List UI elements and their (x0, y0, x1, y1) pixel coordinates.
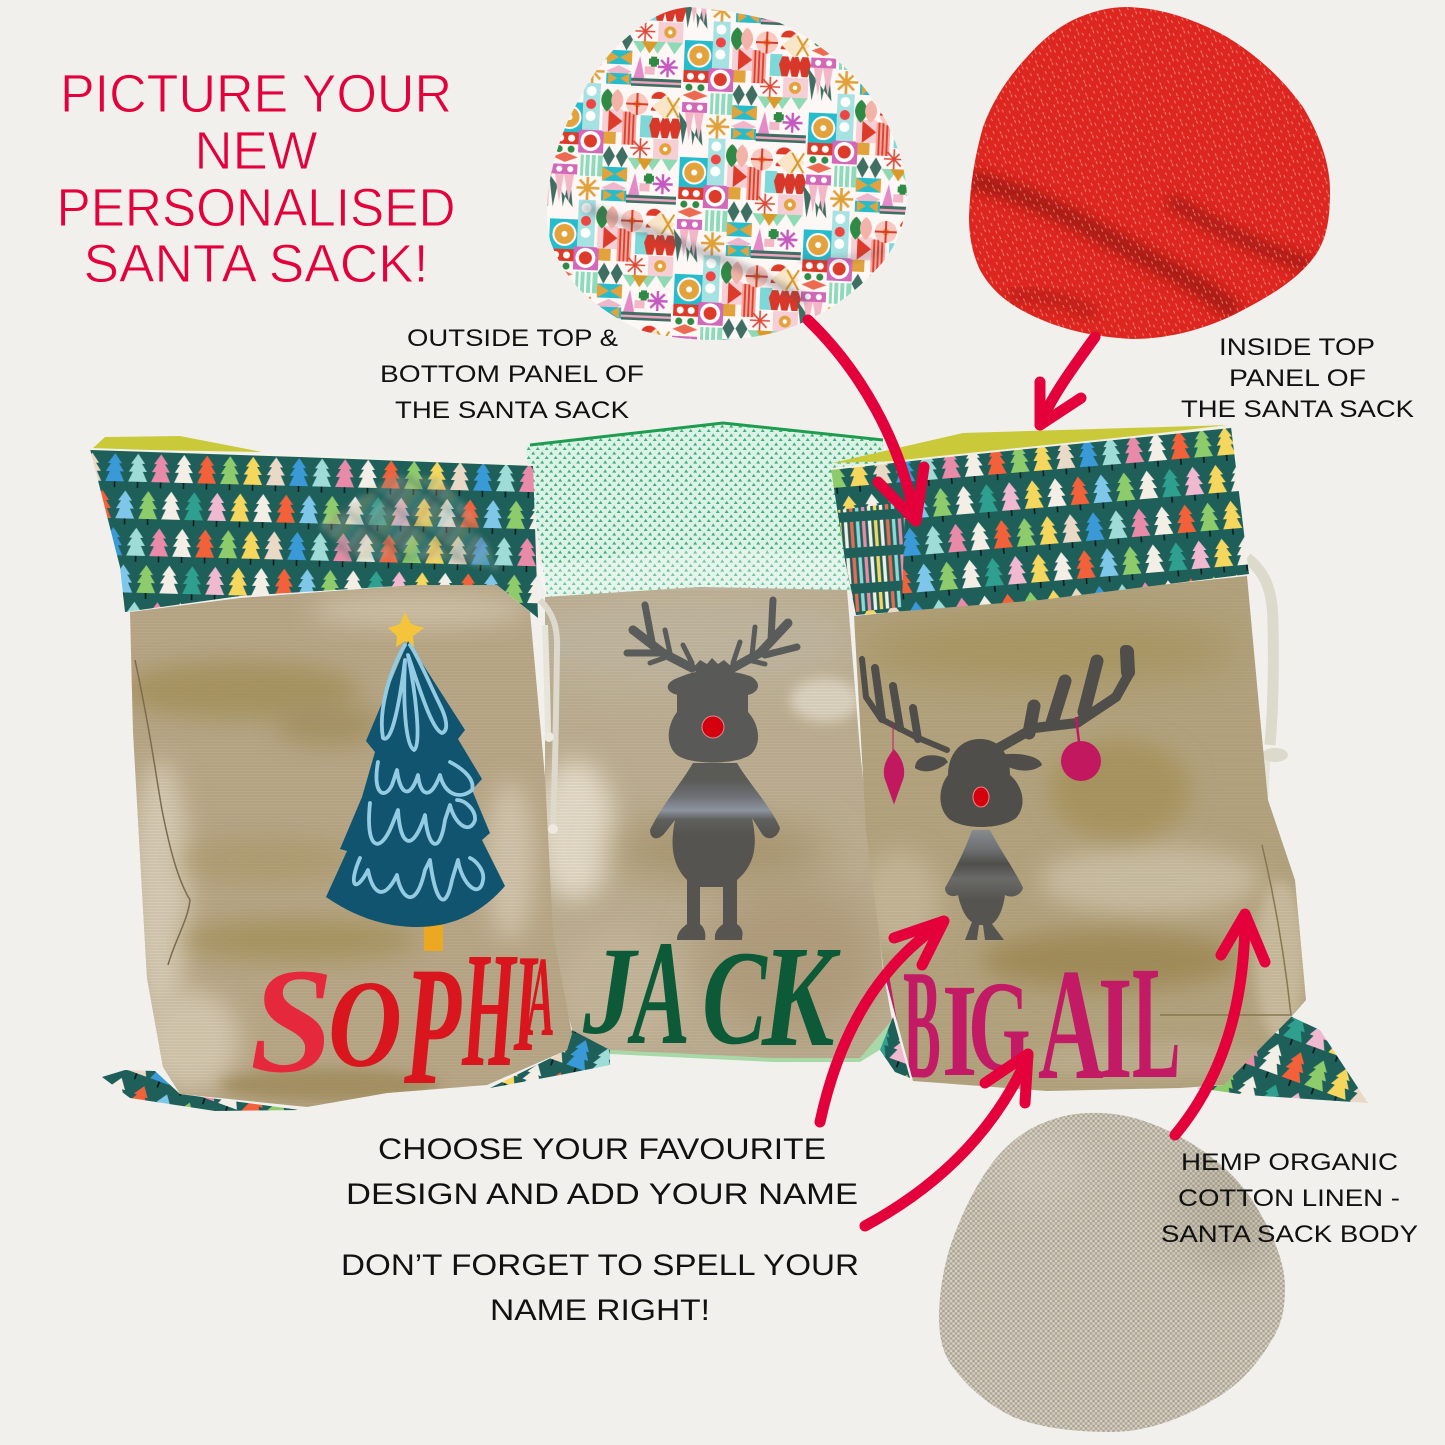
green fabric base (610, 1012, 896, 1062)
name: SOPHIA: A (525, 933, 555, 1060)
name: ABIGAIL: B (903, 937, 941, 1112)
linen body (130, 585, 572, 1107)
bauble left (884, 724, 904, 803)
arrow: red swatch to lining (1040, 337, 1095, 425)
trunk (424, 925, 443, 951)
name: JACK: C (702, 924, 768, 1073)
name: SOPHIA: P (403, 932, 462, 1120)
title (56, 64, 456, 294)
arrow: choose your design to reindeer (820, 921, 944, 1122)
band fabric (831, 427, 1249, 615)
panel: Jack sack, green top and reindeer (520, 423, 900, 1077)
name: ABIGAIL (886, 970, 1178, 1078)
linen body (854, 576, 1306, 1091)
arrow: geometric swatch to band (808, 320, 924, 521)
squiggle decorations (354, 645, 483, 900)
star (388, 612, 424, 647)
band gathered strips (838, 502, 905, 612)
name: SOPHIA (250, 919, 555, 1120)
label: outside panel: THE SANTA SACK (395, 397, 629, 424)
name: ABIGAIL: I (1098, 947, 1132, 1110)
bottom fold fabric (102, 1030, 610, 1111)
band fold highlight (318, 475, 500, 570)
name: JACK: J (582, 923, 640, 1061)
name: ABIGAIL: A (1038, 937, 1104, 1114)
label: inside panel: PANEL OF (1229, 365, 1366, 392)
bottom fold fabric (880, 1016, 1368, 1103)
name: SOPHIA: H (461, 919, 518, 1102)
callout: choose your design: DESIGN AND ADD YOUR NAME (346, 1178, 858, 1211)
tree (326, 612, 505, 951)
reindeer (862, 650, 1130, 940)
label: hemp body (1161, 1149, 1418, 1248)
label: inside panel (1181, 334, 1414, 423)
name: JACK (582, 910, 841, 1077)
name: ABIGAIL: A (860, 942, 909, 1109)
name: ABIGAIL: G (968, 956, 1031, 1099)
title: PERSONALISED (56, 178, 456, 238)
drawstring rope (540, 600, 558, 834)
label: hemp body: COTTON LINEN - (1178, 1185, 1400, 1212)
label: inside panel: THE SANTA SACK (1181, 396, 1414, 423)
callout: spell your name: NAME RIGHT! (490, 1294, 710, 1327)
swatch: outside geometric fabric (540, 0, 915, 345)
reindeer silhouette (627, 600, 797, 940)
swatch: inside red fabric (960, 0, 1340, 345)
green fabric top panel (525, 424, 885, 600)
swatch: hemp linen (935, 1110, 1290, 1435)
panel: Sophia sack, tree (90, 436, 610, 1120)
label: outside panel: BOTTOM PANEL OF (380, 361, 644, 388)
bauble right (1061, 717, 1101, 781)
label: hemp body: SANTA SACK BODY (1161, 1221, 1418, 1248)
yellow lining (832, 425, 1228, 463)
callout: spell your name: DON’T FORGET TO SPELL YOUR (341, 1249, 859, 1282)
callout: choose your design (346, 1133, 858, 1211)
callout: choose your design: CHOOSE YOUR FAVOURITE (378, 1133, 826, 1166)
arrow: spell your name to ABIGAIL (865, 1054, 1028, 1226)
red nose (973, 787, 989, 807)
panel: Abigail sack, reindeer with baubles (831, 425, 1368, 1114)
red nose (702, 716, 724, 738)
label: outside panel: OUTSIDE TOP & (407, 325, 618, 352)
label: outside panel (380, 325, 644, 424)
name: ABIGAIL: L (1132, 934, 1181, 1113)
name: SOPHIA: I (513, 926, 539, 1081)
title: PICTURE YOUR (60, 64, 452, 124)
band fabric (90, 449, 538, 618)
name: SOPHIA: S (250, 938, 333, 1104)
title: NEW (194, 121, 318, 181)
name: SOPHIA: O (328, 954, 402, 1093)
callout: spell your name (341, 1249, 859, 1327)
title: SANTA SACK! (84, 234, 428, 294)
arrow: hemp swatch to body (1175, 914, 1265, 1135)
label: inside panel: INSIDE TOP (1219, 334, 1375, 361)
name: JACK: K (761, 916, 841, 1077)
name: ABIGAIL: I (942, 957, 977, 1104)
name: JACK: A (627, 910, 690, 1076)
label: hemp body: HEMP ORGANIC (1181, 1149, 1398, 1176)
yellow lining (92, 436, 262, 452)
drawstring rope with knots (1247, 558, 1288, 838)
linen body (545, 587, 892, 1058)
